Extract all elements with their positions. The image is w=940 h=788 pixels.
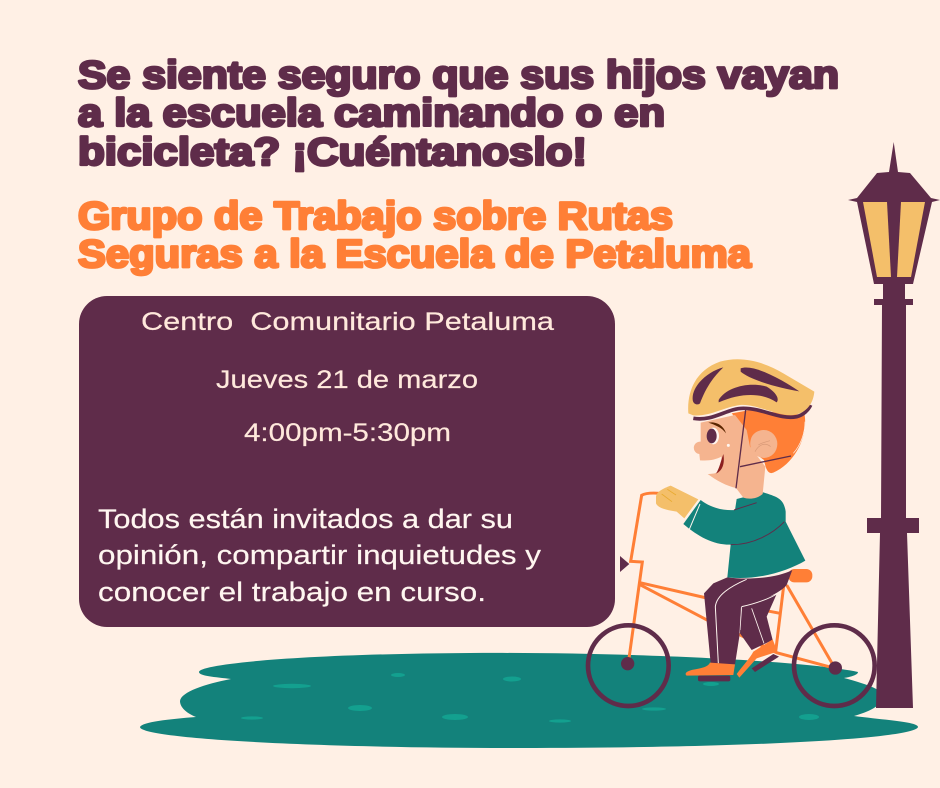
invitation text bbox=[98, 504, 542, 607]
sweater bbox=[683, 492, 805, 578]
title: Se siente seguro que sus hijos vayan bbox=[78, 54, 839, 97]
event location, date and time bbox=[141, 308, 554, 447]
invitation text: opinión, compartir inquietudes y bbox=[98, 540, 542, 570]
event location, date and time: Jueves 21 de marzo bbox=[216, 366, 478, 394]
helmet strap bbox=[736, 410, 791, 488]
title: bicicleta? ¡Cuéntanoslo! bbox=[78, 131, 587, 174]
icon: street lamp bbox=[848, 142, 940, 708]
event location, date and time: 4:00pm-5:30pm bbox=[244, 419, 451, 447]
subtitle: Seguras a la Escuela de Petaluma bbox=[78, 233, 751, 276]
panel background bbox=[79, 296, 615, 627]
hair bbox=[732, 410, 805, 473]
subtitle bbox=[78, 195, 751, 276]
event location, date and time: Centro Comunitario Petaluma bbox=[141, 308, 554, 336]
bicycle bbox=[588, 493, 875, 706]
back leg and pedal bbox=[737, 594, 779, 678]
panel: event details bbox=[79, 296, 615, 627]
title: a la escuela caminando o en bbox=[78, 92, 665, 135]
ground: green grass bbox=[140, 653, 918, 748]
invitation text: conocer el trabajo en curso. bbox=[98, 577, 486, 607]
title bbox=[78, 54, 839, 174]
illustration: child riding a bicycle bbox=[588, 359, 875, 706]
head bbox=[694, 415, 805, 499]
front leg and shoe bbox=[686, 570, 792, 681]
glove bbox=[656, 486, 698, 518]
helmet bbox=[688, 359, 814, 419]
subtitle: Grupo de Trabajo sobre Rutas bbox=[78, 195, 673, 238]
invitation text: Todos están invitados a dar su bbox=[98, 504, 513, 534]
